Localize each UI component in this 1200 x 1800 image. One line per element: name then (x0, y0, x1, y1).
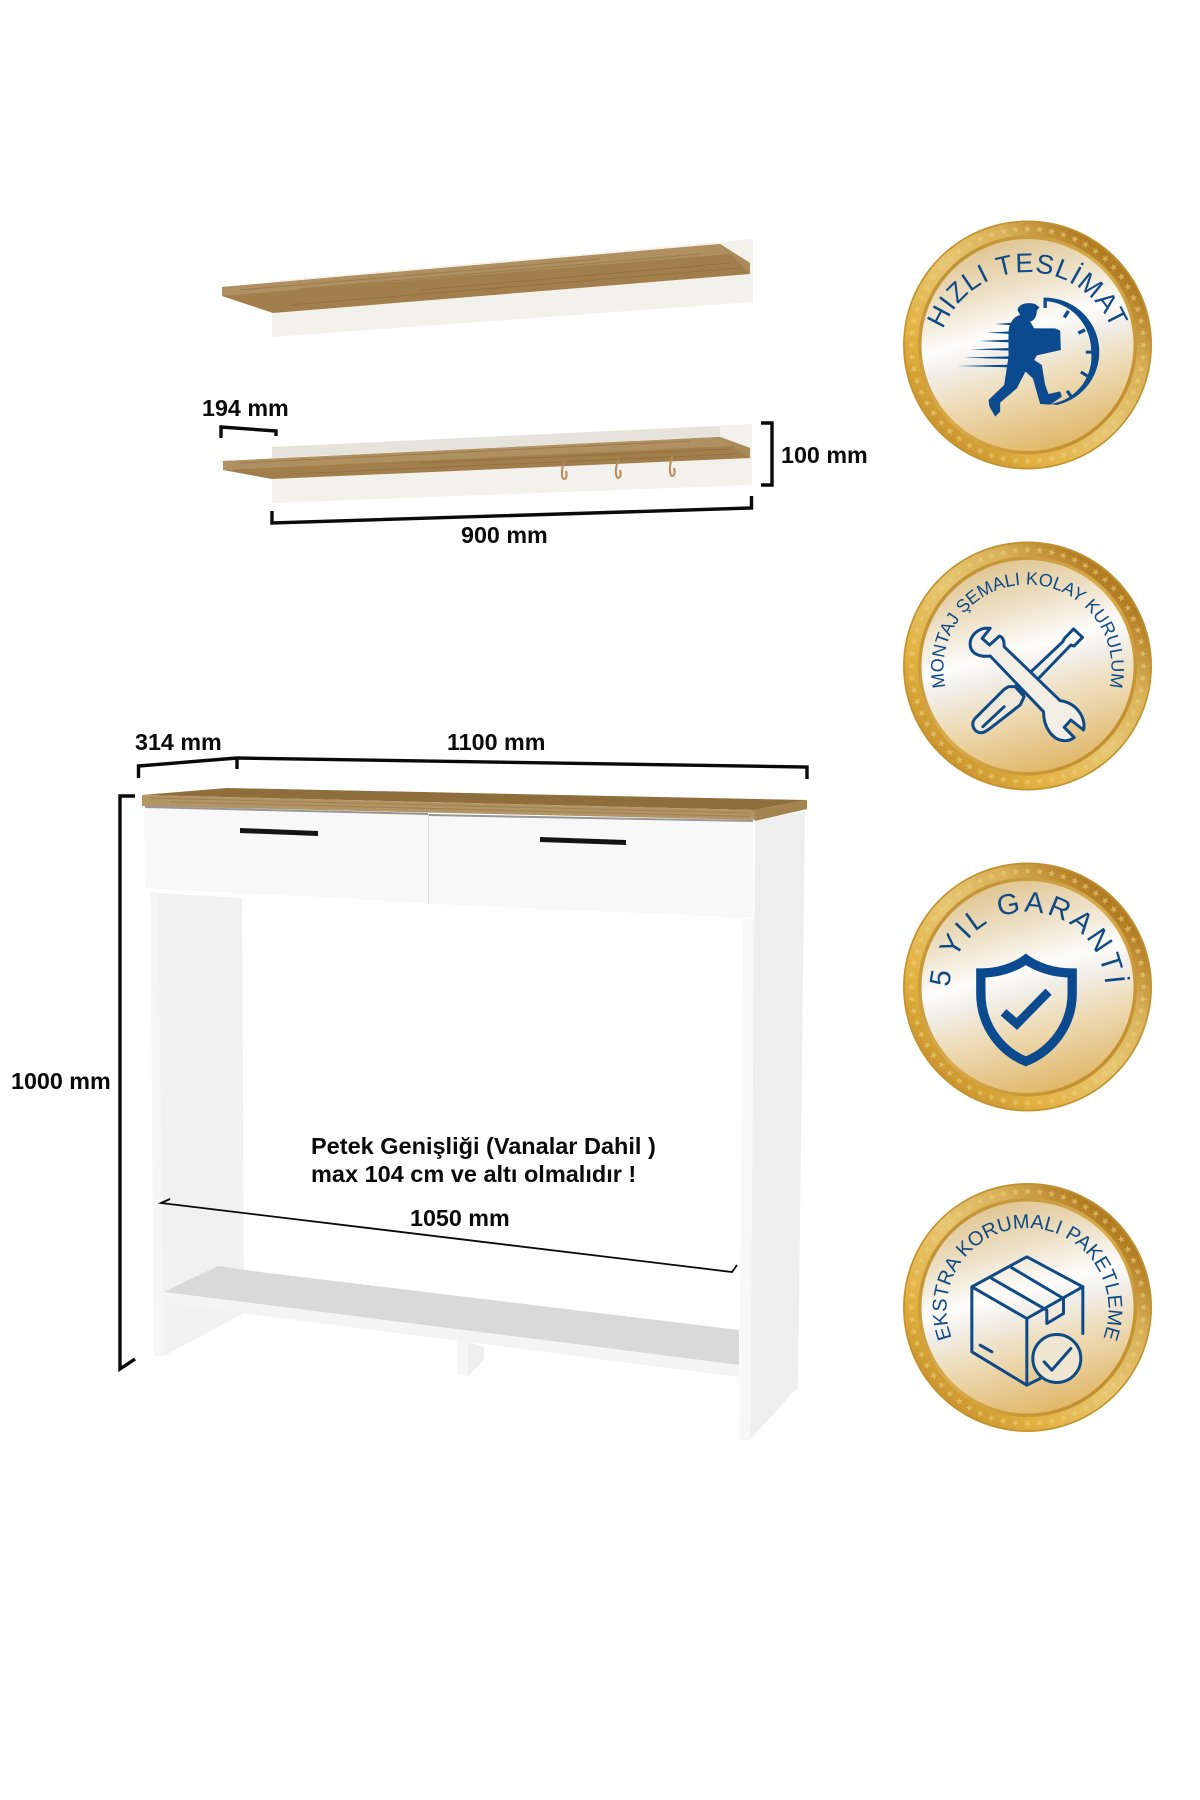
dimension: 100 mm (761, 423, 868, 485)
dimension: 900 mm (272, 496, 752, 548)
icon: shield with check (981, 959, 1072, 1061)
dimension: 1050 mm (161, 1199, 737, 1272)
radiator width note: max 104 cm ve altı olmalıdır ! (311, 1161, 636, 1187)
right handle (540, 837, 626, 845)
badge: 5 year warranty (903, 862, 1152, 1112)
centre support (457, 1340, 484, 1376)
radiator width note (311, 1133, 656, 1187)
left drawer (144, 807, 428, 903)
badge text: 5 YIL GARANTİ (930, 892, 1130, 986)
lower wall shelf with hooks (223, 424, 752, 503)
dimension: 1050 mm: 1050 mm (410, 1205, 510, 1231)
icon: courier running with clock (957, 298, 1099, 417)
badge: easy assembly (903, 542, 1152, 790)
top wall shelf (222, 239, 753, 337)
dimension: 1100 mm (237, 729, 807, 779)
radiator width note: Petek Genişliği (Vanalar Dahil ) (311, 1133, 656, 1159)
dimension: 900 mm: 900 mm (461, 522, 548, 548)
dimension: 194 mm: 194 mm (202, 395, 289, 421)
hook 2 (616, 459, 621, 478)
right leg (739, 811, 805, 1440)
icon: wrench and screwdriver (970, 628, 1084, 741)
console table (142, 788, 807, 1440)
dimension: 194 mm (202, 395, 289, 438)
hook 3 (670, 456, 675, 476)
dimension: 100 mm: 100 mm (781, 442, 868, 468)
dimension: 1000 mm (11, 796, 135, 1369)
lower shelf (164, 1266, 739, 1377)
right drawer (429, 814, 753, 918)
badge: extra protective packaging (903, 1183, 1152, 1432)
drawer divider (428, 814, 430, 904)
hook 1 (562, 461, 567, 479)
wood table top (142, 788, 807, 822)
badge: fast delivery (903, 220, 1152, 470)
dimension: 1000 mm: 1000 mm (11, 1068, 111, 1094)
badge text: MONTAJ ŞEMALI KOLAY KURULUM (930, 572, 1124, 688)
icon: parcel with check (972, 1257, 1083, 1385)
left handle (240, 828, 318, 836)
dimension: 314 mm: 314 mm (135, 729, 222, 755)
dimension: 314 mm (135, 729, 237, 778)
badge text: EKSTRA KORUMALI PAKETLEME (932, 1214, 1122, 1341)
dimension: 1100 mm: 1100 mm (447, 729, 545, 755)
badge text: HIZLI TESLİMAT (927, 253, 1128, 328)
left leg (150, 892, 244, 1356)
